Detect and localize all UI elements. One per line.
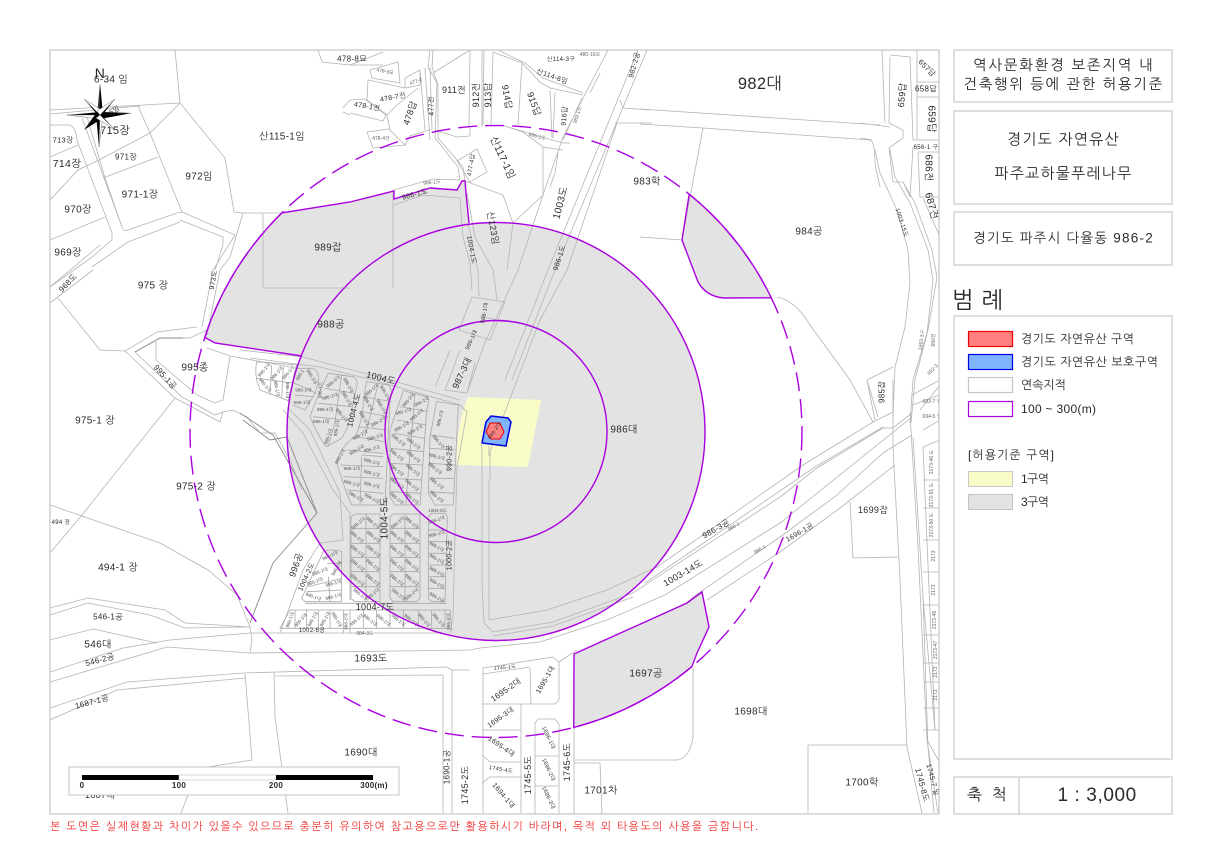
parcel labels: 975-1 장	[75, 414, 115, 426]
residential parcel grid: 986-1대	[405, 450, 421, 464]
parcel labels: 1696-1대	[540, 725, 557, 750]
parcel labels: 715장	[100, 124, 130, 137]
residential parcel grid: 986-1대	[428, 553, 445, 565]
parcel labels: 1696-3대	[540, 785, 557, 810]
parcel labels: 970장	[64, 204, 92, 216]
residential parcel grid: 986-1대	[427, 461, 443, 475]
parcel labels: 986-1도	[423, 179, 441, 187]
residential parcel grid: 986-1대	[428, 591, 445, 604]
residential parcel grid	[256, 362, 458, 633]
parcel labels: 686전	[922, 154, 934, 182]
parcel labels: 990-2공	[446, 445, 454, 471]
parcel labels: 477전	[428, 96, 436, 116]
panel: title: 역사문화환경 보존지역 내	[973, 57, 1153, 74]
residential parcel grid: 1004-8도	[428, 508, 448, 513]
residential parcel grid: 986-1대	[390, 516, 406, 530]
parcel labels: 996공	[287, 551, 305, 578]
panel: map scale: 1 : 3,000	[1058, 785, 1136, 806]
parcel labels: 2173-47	[933, 641, 939, 659]
residential parcel grid: 986-1대	[404, 558, 420, 572]
panel: heritage name: 경기도 자연유산	[1007, 132, 1119, 148]
parcel labels: 1687대	[85, 790, 115, 800]
residential parcel grid: 986-1대	[333, 420, 341, 437]
residential parcel grid: 986-1대	[285, 611, 295, 629]
parcel labels: 478-8묘	[337, 54, 367, 64]
residential parcel grid: 986-1대	[319, 611, 331, 628]
residential parcel grid: 986-1대	[364, 383, 380, 397]
residential parcel grid: 986-1대	[393, 420, 410, 433]
residential parcel grid: 986-1도	[317, 381, 322, 398]
parcel labels: 1004-5도	[380, 496, 390, 539]
residential parcel grid: 986-1대	[325, 579, 342, 588]
parcel labels: 494-1 장	[98, 562, 138, 574]
parcel labels: 913답	[483, 82, 493, 107]
legend item: protection zone: 경기도 자연유산 보호구역	[1021, 355, 1158, 369]
residential parcel grid: 986-1대	[363, 469, 380, 478]
scale bar: 300(m)	[360, 781, 388, 790]
heritage protection zone (blue)	[482, 416, 511, 446]
residential parcel grid: 986-1대	[365, 573, 381, 587]
parcel labels: 1695-1대	[534, 665, 557, 695]
parcel labels: 1004도	[365, 369, 397, 387]
residential parcel grid: 986-1대	[349, 573, 365, 587]
parcel labels: 1690대	[344, 746, 378, 758]
residential parcel grid: 986-1대	[362, 613, 378, 627]
parcel labels: 713장	[53, 136, 73, 144]
parcel labels: 914답	[500, 84, 514, 110]
parcel labels: 1004-1도	[465, 235, 477, 265]
parcel labels: 995종	[181, 362, 209, 374]
parcel labels: 478-7전	[379, 91, 407, 104]
parcel labels: 986-3공	[701, 518, 731, 540]
buffer rings 100 to 300 m	[190, 126, 802, 738]
residential parcel grid: 986-1대	[413, 395, 430, 408]
panel: heritage name	[954, 111, 1172, 204]
parcel labels: 1695-4대	[487, 735, 516, 759]
residential parcel grid: 986-1대	[431, 434, 445, 450]
heritage zone (red)	[486, 423, 504, 439]
parcel labels: 2173-48	[932, 611, 938, 629]
residential parcel grid: 986-1대	[335, 407, 349, 423]
parcel labels: 480-16묘	[580, 52, 600, 58]
residential parcel grid: 986-1대	[348, 444, 365, 456]
residential parcel grid: 986-1대	[352, 587, 368, 601]
residential parcel grid: 986-1대	[404, 544, 420, 558]
parcel labels: 2173	[931, 584, 937, 596]
residential parcel grid: 986-1대	[389, 544, 405, 558]
legend item: zone 1: 1구역	[1021, 472, 1049, 486]
parcel labels: 산114-6임	[535, 67, 569, 86]
map frame	[50, 50, 939, 814]
residential parcel grid: 986-1대	[390, 613, 406, 627]
residential parcel grid: 986-1대	[429, 476, 445, 490]
residential parcel grid: 986-1대	[349, 558, 365, 572]
parcel labels: 693-7 일	[923, 398, 942, 405]
parcel labels: 972임	[185, 170, 213, 182]
residential parcel grid: 986-1대	[417, 612, 431, 628]
parcel labels: 2173-50 도	[929, 512, 935, 537]
parcel labels: 982대	[738, 75, 782, 93]
parcel labels: 988공	[317, 320, 345, 330]
parcel labels: 1745-2도	[460, 765, 470, 804]
parcel labels: 911전	[442, 85, 466, 95]
residential parcel grid: 986-1대	[270, 365, 284, 381]
legend item: heritage zone: 경기도 자연유산 구역	[1021, 332, 1134, 346]
parcel labels: 915답	[525, 91, 543, 118]
residential parcel grid: 986-1대	[403, 613, 419, 627]
residential parcel grid: 986-1대	[375, 398, 388, 415]
parcel labels: 1695-3대	[486, 706, 515, 730]
residential parcel grid: 986-1대	[389, 558, 405, 572]
residential parcel grid: 986-1대	[428, 515, 445, 525]
residential parcel grid: 986-1대	[323, 428, 333, 445]
residential parcel grid: 986-1대	[317, 407, 333, 412]
zone 3 grey areas	[205, 181, 771, 727]
residential parcel grid: 986-1대	[325, 375, 341, 389]
legend item: zone 1	[968, 472, 1049, 486]
parcel labels: 983학	[633, 176, 661, 188]
parcel labels: 546-2공	[84, 652, 116, 668]
parcel labels: 971-1장	[122, 188, 159, 200]
residential parcel grid: 986-1대	[407, 424, 423, 436]
legend item: buffer rings	[968, 402, 1096, 416]
residential parcel grid: 986-1대	[404, 530, 420, 544]
panel: address	[954, 212, 1172, 265]
parcel labels: 477-2	[409, 77, 423, 87]
parcel labels: 987-3대	[450, 356, 474, 390]
legend item: protection zone	[968, 354, 1158, 370]
parcel labels: 1004-4도	[345, 392, 363, 428]
parcel labels: 714장	[53, 158, 81, 170]
parcel labels: 1003-14도	[661, 558, 705, 588]
parcel labels: 916답	[560, 106, 569, 126]
scale bar	[69, 767, 399, 795]
residential parcel grid: 986-1대	[389, 530, 405, 544]
panel: address: 경기도 파주시 다율동 986-2	[973, 230, 1153, 246]
residential parcel grid: 986-1대	[428, 565, 445, 578]
residential parcel grid: 986-1대	[285, 382, 290, 398]
panel: heritage name: 파주교하물푸레나무	[994, 166, 1132, 182]
parcel labels: 1745-7 일	[924, 763, 941, 797]
residential parcel grid: 986-1대	[435, 410, 445, 427]
parcel labels: 912전	[471, 83, 481, 107]
residential parcel grid: 986-1대	[446, 614, 451, 630]
legend item: buffer rings: 100 ~ 300(m)	[1021, 402, 1096, 416]
parcel labels: 1697공	[629, 668, 663, 680]
parcel labels: 986-1대	[464, 329, 479, 351]
parcel labels: 657답	[916, 57, 938, 79]
parcel labels: 2173-51 도	[929, 482, 935, 507]
legend item: heritage zone	[968, 332, 1134, 346]
legend heading: 범 례	[952, 287, 1003, 313]
residential parcel grid: 986-1대	[404, 516, 420, 530]
legend item: zone 3	[968, 494, 1049, 510]
parcel labels	[52, 51, 942, 810]
residential parcel grid: 986-1대	[405, 463, 421, 477]
panel: map scale	[954, 777, 1172, 814]
residential parcel grid: 986-1대	[295, 387, 311, 392]
parcel labels: 659답	[896, 82, 908, 108]
residential parcel grid: 986-1대	[379, 384, 391, 401]
parcel labels: 1003-15도	[894, 207, 909, 238]
parcel labels: 716임	[100, 104, 121, 121]
parcel labels: 971장	[115, 152, 137, 162]
panel: cadastral map	[50, 50, 942, 814]
residential parcel grid: 986-1대	[273, 380, 281, 397]
parcel labels: 656-1 구	[914, 144, 938, 151]
parcel labels: 973도	[208, 270, 219, 290]
residential parcel grid: 986-1대	[389, 573, 405, 587]
parcel labels: 985잡	[878, 381, 886, 403]
panel: legend	[954, 316, 1172, 759]
residential parcel grid: 986-1대	[363, 444, 380, 454]
residential parcel grid: 986-1대	[366, 433, 384, 442]
parcel labels: 1699잡	[858, 505, 888, 515]
parcel labels: 1003도	[551, 185, 571, 220]
parcel labels: 1690-1공	[442, 750, 452, 784]
residential parcel grid: 986-1대	[365, 516, 381, 530]
legend sub-heading: [허용기준 구역]	[968, 448, 1054, 462]
residential parcel grid: 986-1대	[330, 611, 343, 628]
residential parcel grid: 986-1대	[363, 492, 380, 505]
parcel labels: 1004-7도	[356, 602, 395, 612]
parcel labels: 478답	[401, 99, 419, 126]
parcel labels: 984-3도	[356, 631, 374, 637]
parcel labels: 984공	[795, 226, 823, 238]
parcel labels: 산114-3구	[547, 56, 575, 63]
residential parcel grid: 986-1대	[365, 558, 381, 572]
parcel labels: 1745-4도	[488, 764, 514, 775]
parcel labels: 986-1	[727, 521, 741, 533]
parcel labels: 478-4전	[372, 135, 390, 142]
parcel labels: 2173	[933, 689, 939, 701]
residential parcel grid: 986-1대	[431, 612, 445, 628]
parcel labels: 1698대	[734, 706, 768, 718]
parcel labels: 1745-8도	[913, 767, 931, 803]
residential parcel grid: 986-1대	[428, 452, 445, 461]
residential parcel grid: 986-1대	[375, 613, 391, 627]
residential parcel grid: 986-1대	[281, 365, 295, 381]
parcel labels: 690전	[930, 333, 937, 347]
residential parcel grid: 986-1대	[365, 587, 381, 601]
parcel labels: 546대	[84, 638, 112, 650]
parcel labels: 2173	[931, 550, 937, 562]
legend item: parcels: 연속지적	[1021, 378, 1066, 392]
residential parcel grid: 986-1대	[390, 587, 406, 601]
residential parcel grid: 986-1대	[389, 476, 405, 490]
parcel labels: 1745-5도	[523, 755, 533, 794]
parcel labels: 989잡	[314, 242, 342, 254]
residential parcel grid: 986-1대	[350, 516, 366, 530]
residential parcel grid: 986-1대	[370, 415, 387, 428]
residential parcel grid: 986-1대	[258, 377, 272, 393]
panel: map scale: 축 척	[967, 786, 1007, 804]
parcel labels: 986-1도	[401, 187, 429, 202]
parcel labels: 1000-2공	[446, 540, 454, 570]
residential parcel grid: 986-1대	[306, 611, 319, 628]
parcel labels: 1696-2대	[540, 757, 557, 782]
parcel labels: 1701차	[584, 784, 618, 796]
residential parcel grid: 986-1대	[390, 433, 406, 447]
parcel labels: 2173	[933, 666, 939, 678]
parcel labels: 6-34 임	[94, 74, 128, 86]
residential parcel grid: 986-1대	[365, 530, 381, 544]
residential parcel grid: 986-1대	[334, 448, 346, 465]
residential parcel grid: 986-1대	[362, 395, 375, 412]
road lines through site	[482, 443, 489, 456]
parcel labels: 1693-3구	[918, 329, 926, 350]
parcel labels: 986-1대	[479, 302, 490, 324]
residential parcel grid: 986-1대	[428, 529, 445, 539]
parcel labels: 687전	[922, 191, 941, 221]
residential parcel grid: 986-1대	[409, 408, 425, 422]
panel: title: 건축행위 등에 관한 허용기준	[964, 77, 1163, 93]
disclaimer note: 본 도면은 실제현황과 차이가 있을수 있으므로 충분히 유의하여 참고용으로만 활용하시기 바라며, 목적 외 타용도의 사용을 금합니다.	[50, 820, 758, 833]
residential parcel grid: 986-1대	[429, 490, 445, 504]
north compass rose	[67, 65, 132, 147]
parcel labels: 1687-1공	[74, 693, 110, 711]
parcel labels: 546-1공	[93, 612, 123, 622]
residential parcel grid: 986-1대	[343, 614, 348, 630]
parcel labels: 2173-46 도	[929, 449, 935, 474]
scale bar: 0	[80, 781, 85, 790]
parcel labels: 986-1	[753, 544, 767, 556]
residential parcel grid: 986-1대	[313, 419, 329, 424]
residential parcel grid: 986-1대	[352, 429, 368, 441]
residential parcel grid: 986-1대	[305, 368, 318, 385]
residential parcel grid: 986-1대	[404, 491, 420, 505]
parcel labels: 산123임	[485, 211, 501, 245]
parcel labels: 1700학	[845, 776, 879, 788]
residential parcel grid: 986-1	[295, 368, 305, 381]
residential parcel grid: 986-1대	[311, 567, 329, 577]
residential parcel grid: 986-1대	[389, 448, 405, 462]
parcel labels: 1693도	[354, 654, 388, 664]
residential parcel grid: 986-1대	[428, 540, 445, 553]
parcel labels: 986-2대	[486, 421, 503, 441]
parcel labels: 692-3	[926, 363, 940, 377]
parcel labels: 694-5 일	[923, 413, 942, 420]
parcel labels: 478-1전	[353, 100, 381, 113]
north compass rose: N	[95, 65, 105, 81]
parcel labels: 477-4답	[466, 153, 477, 177]
parcel labels: 1745-1도	[494, 664, 516, 672]
parcel labels: 989-1도	[572, 105, 584, 124]
residential parcel grid: 986-1대	[294, 400, 310, 405]
parcel labels: 1004-2도	[296, 561, 317, 592]
parcel labels: 1694-1대	[491, 781, 516, 810]
legend item: parcels	[968, 378, 1066, 392]
parcel labels: 986-1도	[552, 244, 567, 272]
parcel labels: 산117-1임	[487, 135, 518, 181]
parcel labels: 968도	[57, 272, 79, 294]
parcel labels: 969장	[54, 246, 82, 258]
parcel labels: 1695-2대	[489, 676, 523, 704]
residential parcel grid: 986-1대	[349, 544, 365, 558]
residential parcel grid: 986-1대	[325, 592, 342, 601]
legend item: zone 3: 3구역	[1021, 495, 1049, 509]
residential parcel grid: 986-1대	[363, 457, 380, 466]
residential parcel grid: 986-1대	[306, 577, 324, 587]
parcel labels: 1002-6공	[299, 627, 325, 634]
parcel labels: 494 장	[52, 519, 70, 526]
residential parcel grid: 986-1대	[395, 407, 412, 416]
residential parcel grid: 986-1대	[404, 573, 420, 587]
parcel labels: 975 장	[138, 280, 168, 292]
zone 1 yellow area	[457, 397, 541, 467]
residential parcel grid: 986-1대	[342, 377, 355, 393]
parcel labels: 658답	[915, 84, 937, 94]
residential parcel grid: 986-1대	[428, 577, 445, 590]
residential parcel grid: 986-1대	[348, 490, 364, 503]
residential parcel grid: 986-1대	[404, 478, 420, 492]
parcel labels: 산115-1임	[259, 130, 305, 142]
parcel labels: 659답	[926, 105, 938, 133]
parcel labels: 1696-1공	[785, 521, 815, 544]
residential parcel grid: 986-1대	[363, 480, 380, 490]
scale bar: 200	[269, 781, 283, 790]
parcel labels: 975-2 장	[176, 480, 216, 492]
residential parcel grid: 986-1대	[294, 612, 308, 628]
residential parcel grid: 986-1대	[401, 392, 415, 408]
residential parcel grid: 986-1대	[349, 530, 365, 544]
residential parcel grid: 986-1대	[322, 550, 338, 561]
residential parcel grid: 986-1대	[343, 479, 360, 488]
residential parcel grid: 986-1대	[344, 466, 360, 471]
parcel labels: 478-9묘	[376, 68, 394, 77]
parcel labels: 986대	[610, 424, 638, 436]
residential parcel grid: 986-1대	[330, 560, 343, 577]
residential parcel grid: 986-1대	[257, 362, 271, 378]
residential parcel grid: 986-1대	[389, 463, 405, 477]
residential parcel grid: 986-1대	[349, 613, 365, 627]
residential parcel grid: 986-1대	[358, 410, 370, 427]
residential parcel grid: 986-1대	[405, 436, 421, 450]
parcel labels: 1745-6도	[562, 742, 572, 781]
residential parcel grid: 986-1대	[389, 491, 405, 505]
parcel labels: 986-1도	[528, 132, 547, 142]
parcel labels: 982-2공	[627, 51, 642, 79]
residential parcel grid: 986-1대	[404, 587, 420, 601]
residential parcel grid: 986-1대	[321, 392, 339, 401]
residential parcel grid: 986-1대	[365, 544, 381, 558]
panel: title	[954, 50, 1172, 102]
cadastral parcel lines	[50, 50, 940, 814]
residential parcel grid: 986-1대	[340, 390, 353, 407]
residential parcel grid: 986-1대	[305, 592, 322, 602]
scale bar: 100	[172, 781, 186, 790]
parcel labels: 995-1공	[152, 363, 178, 391]
